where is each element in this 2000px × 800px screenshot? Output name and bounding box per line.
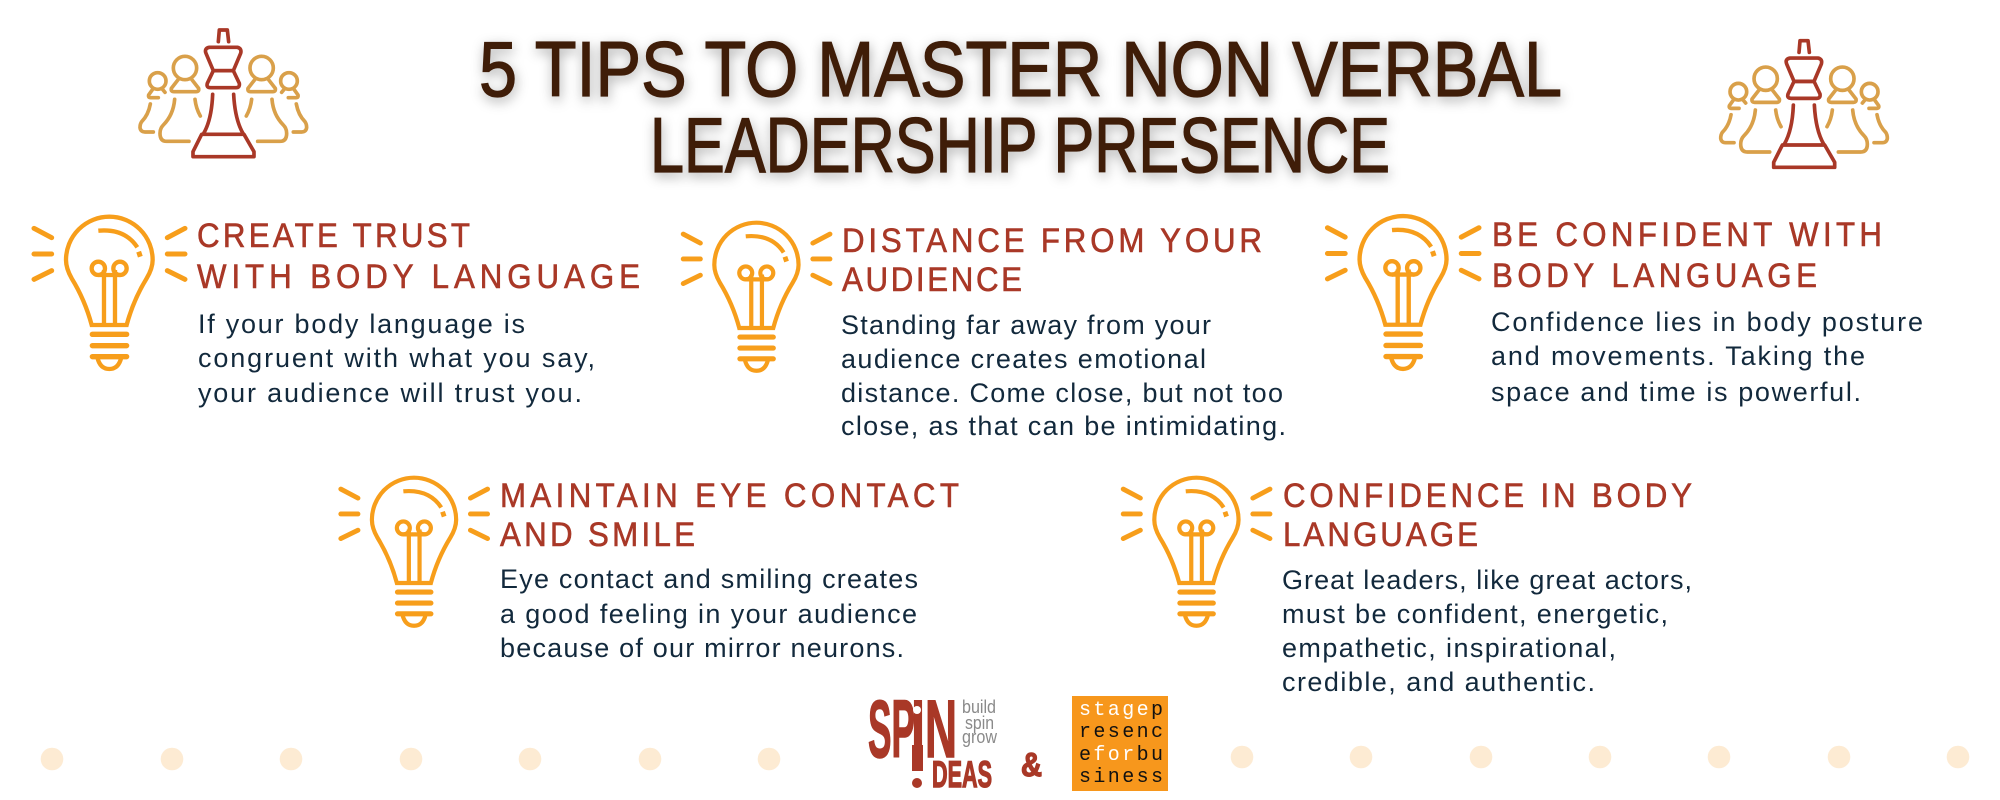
heading: distance from your audience: DISTANCE FROM YOUR xyxy=(842,221,1262,259)
heading: be confident with body language: BODY LANGUAGE xyxy=(1492,256,1817,294)
text: tip 5 body xyxy=(1282,565,1692,697)
ampersand: & xyxy=(1021,746,1042,783)
text: tip 1 body: If your body language is xyxy=(198,309,525,339)
panel: tip 1 xyxy=(34,216,640,408)
text: tip 2 body: close, as that can be intimidating. xyxy=(841,411,1286,441)
text: tip 2 body: audience creates emotional xyxy=(841,344,1206,374)
icon: light bulb 4 xyxy=(341,478,488,626)
dots row right xyxy=(1231,746,1969,768)
heading: confidence in body language xyxy=(1283,476,1692,553)
text: tip 2 body xyxy=(841,310,1286,441)
heading: maintain eye contact and smile: AND SMILE xyxy=(500,515,695,553)
panel: tip 3 xyxy=(1327,215,1923,407)
heading: create trust xyxy=(197,216,640,295)
title xyxy=(479,25,1562,189)
text: tip 1 body: your audience will trust you. xyxy=(198,378,582,408)
text: tip 4 body: because of our mirror neurons. xyxy=(500,633,904,663)
text: tip 2 body: distance. Come close, but not too xyxy=(841,378,1283,408)
text: tip 3 body: space and time is powerful. xyxy=(1491,377,1861,407)
heading: maintain eye contact and smile xyxy=(500,476,959,553)
logo: spin ideas: I xyxy=(911,684,925,775)
logo: spin ideas: spin xyxy=(965,713,994,733)
text: tip 2 body: Standing far away from your xyxy=(841,310,1211,340)
text: tip 5 body: must be confident, energetic, xyxy=(1282,599,1668,629)
panel: tip 2 xyxy=(683,221,1286,441)
heading: distance from your audience xyxy=(842,221,1262,298)
icon: light bulb 2 xyxy=(683,223,830,371)
icon: chess pieces left xyxy=(140,30,307,157)
text: tip 5 body: empathetic, inspirational, xyxy=(1282,633,1616,663)
icon: light bulb 3 xyxy=(1327,216,1479,369)
icon: light bulb 5 xyxy=(1123,478,1270,626)
heading: distance from your audience: AUDIENCE xyxy=(842,260,1022,298)
text: tip 5 body: credible, and authentic. xyxy=(1282,667,1595,697)
text: tip 4 body xyxy=(500,564,918,663)
logo: spin ideas: DEAS xyxy=(932,754,992,795)
heading: confidence in body language: LANGUAGE xyxy=(1283,515,1478,553)
icon: light bulb 1 xyxy=(34,217,185,369)
text: tip 4 body: a good feeling in your audience xyxy=(500,599,917,629)
heading: confidence in body language: CONFIDENCE IN BODY xyxy=(1283,476,1692,514)
logo: stage presence for business: siness xyxy=(1079,766,1163,789)
panel: tip 5 xyxy=(1123,476,1692,697)
title: LEADERSHIP PRESENCE xyxy=(650,101,1390,189)
logo: spin ideas: N xyxy=(925,684,957,775)
heading: create trust: CREATE TRUST xyxy=(197,216,470,254)
title: 5 TIPS TO MASTER NON VERBAL xyxy=(479,25,1562,113)
logo: stage presence for business xyxy=(1072,696,1168,791)
text: tip 4 body: Eye contact and smiling creates xyxy=(500,564,918,594)
text: tip 3 body: Confidence lies in body posture xyxy=(1491,307,1923,337)
logo: stage presence for business: eforbu xyxy=(1079,744,1163,767)
heading: be confident with body language xyxy=(1492,215,1882,294)
logo: spin ideas: build xyxy=(962,697,996,717)
heading: create trust: WITH BODY LANGUAGE xyxy=(197,257,640,295)
text: tip 5 body: Great leaders, like great actors, xyxy=(1282,565,1692,595)
text: tip 3 body: and movements. Taking the xyxy=(1491,341,1865,371)
icon: chess pieces right xyxy=(1721,41,1887,167)
logo: spin ideas: grow xyxy=(962,727,998,747)
logo: spin ideas xyxy=(868,684,998,795)
text: tip 1 body: congruent with what you say, xyxy=(198,343,595,373)
heading: maintain eye contact and smile: MAINTAIN EYE CONTACT xyxy=(500,476,959,514)
logo: stage presence for business: resenc xyxy=(1079,721,1163,744)
text: tip 3 body xyxy=(1491,307,1923,407)
panel: tip 4 xyxy=(341,476,959,663)
dots row left xyxy=(41,748,780,770)
text: tip 1 body xyxy=(198,309,595,408)
logo: spin ideas: SP xyxy=(868,684,915,775)
heading: be confident with body language: BE CONFIDENT WITH xyxy=(1492,215,1882,253)
logo: stage presence for business: stagep xyxy=(1079,699,1163,722)
